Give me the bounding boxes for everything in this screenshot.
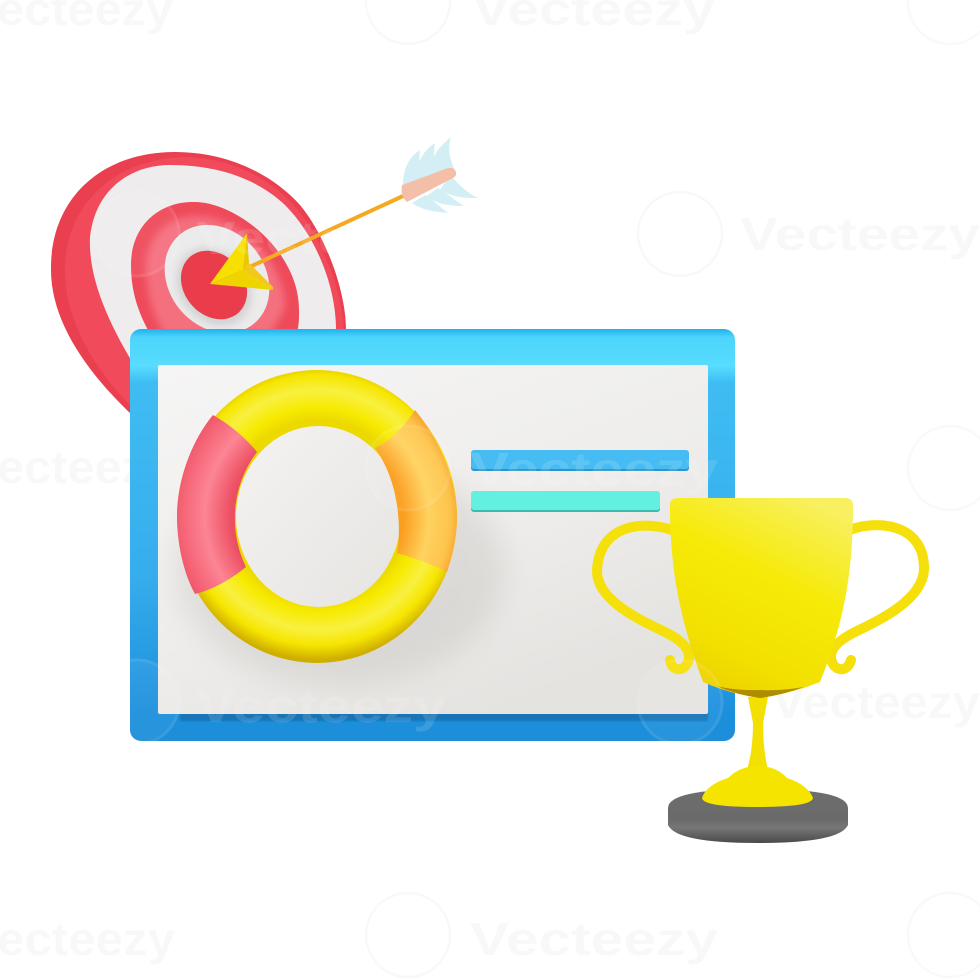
watermarks: Vecteezy (772, 676, 980, 728)
watermarks over artwork (95, 192, 722, 744)
target bullseye (167, 237, 261, 333)
target white ring (90, 165, 336, 390)
trophy cup (670, 498, 853, 698)
arrow feathers (403, 137, 478, 213)
donut orange segment (375, 410, 457, 572)
dashboard panel (158, 365, 708, 721)
arrow (210, 137, 478, 290)
arrow head (210, 233, 273, 290)
donut red segment (177, 415, 257, 594)
trophy handles (597, 526, 689, 669)
trophy base plate (668, 789, 848, 843)
legend bar blue (471, 450, 689, 471)
watermarks over artwork: Vecteezy (196, 212, 447, 264)
trophy cup underside (716, 686, 804, 698)
watermarks: Vecteezy (740, 208, 980, 260)
target (51, 152, 346, 413)
trophy (597, 498, 924, 843)
trophy stem (747, 697, 768, 770)
watermarks: ecteezy (0, 913, 175, 965)
arrow nock (402, 168, 456, 202)
watermarks: ecteezy (0, 441, 173, 493)
arrow shaft (243, 196, 403, 270)
watermarks over artwork: Vecteezy (470, 443, 719, 495)
target inner white ring (143, 204, 291, 354)
legend bar teal (471, 491, 660, 512)
watermarks: Vecteezy (470, 913, 719, 965)
illustration: goal, dashboard and trophy (51, 137, 929, 843)
donut yellow segments (177, 370, 457, 663)
target outer ring (51, 152, 346, 413)
donut chart (177, 370, 457, 663)
target middle ring (131, 202, 299, 350)
trophy foot (702, 766, 813, 807)
watermarks over artwork: Vecteezy (196, 680, 447, 732)
dashboard frame (130, 329, 735, 741)
